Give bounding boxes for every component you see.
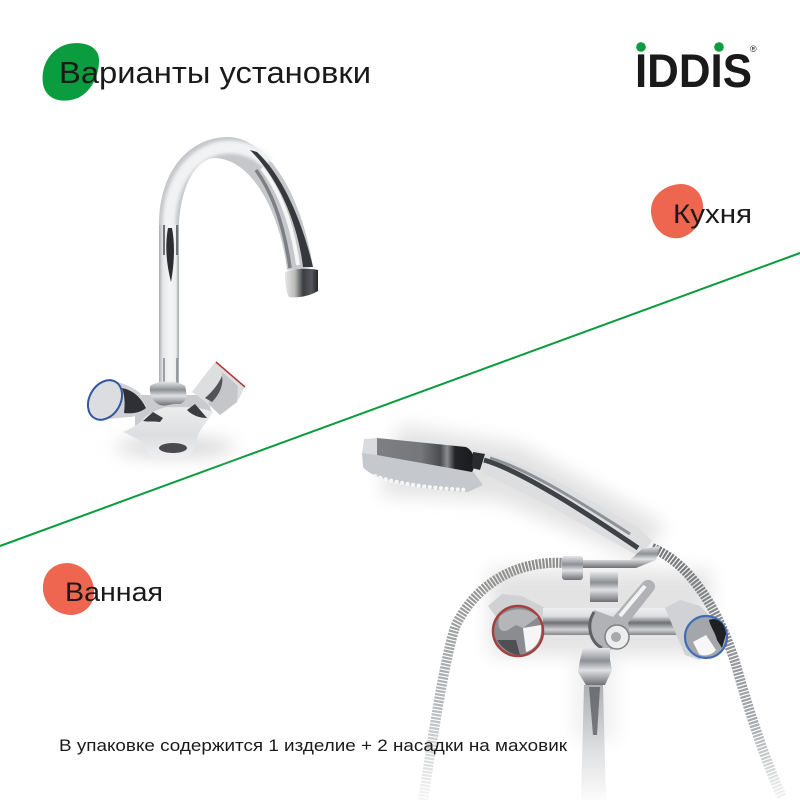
right knob back (665, 600, 710, 660)
package contents note: В упаковке содержится 1 изделие + 2 насадки на маховик (59, 736, 568, 755)
left hose (423, 563, 565, 800)
faucet base (123, 407, 213, 459)
head face (362, 453, 483, 492)
right hose (652, 548, 782, 797)
aerator (285, 269, 318, 297)
shower handle (472, 450, 652, 557)
soft shadows (380, 425, 710, 740)
kitchen text: Кухня (673, 199, 752, 229)
blue knob (685, 616, 727, 658)
green blob (43, 43, 99, 101)
base hole (159, 443, 187, 453)
spout tube (159, 137, 313, 385)
left handle (81, 374, 147, 426)
heading: installation options (43, 43, 371, 101)
shower faucet photo (362, 425, 782, 800)
bathroom text: Ванная (65, 577, 163, 607)
logo dots (636, 42, 724, 52)
shower head (362, 438, 483, 492)
faucet shadow (115, 438, 235, 456)
kitchen faucet photo (81, 137, 318, 459)
heading text: Варианты установки (59, 55, 371, 90)
main bar (543, 608, 687, 635)
collar (150, 382, 186, 406)
orange blob (651, 184, 703, 238)
logo wordmark: IDDIS (635, 44, 752, 97)
logo: IDDIS (635, 42, 757, 97)
spout reflection (166, 228, 174, 282)
nozzles (375, 476, 468, 490)
handle holder (562, 546, 660, 602)
base recesses (143, 404, 207, 422)
right handle (192, 362, 245, 415)
bathroom label (43, 563, 163, 615)
lever handle (590, 580, 655, 650)
kitchen label (651, 184, 752, 238)
divider line (0, 253, 800, 546)
registered mark: ® (750, 44, 757, 54)
bath spout (578, 648, 612, 800)
valve body (488, 594, 710, 660)
left knob back (488, 594, 545, 628)
red knob (493, 606, 543, 656)
head chrome rim (377, 438, 474, 472)
body behind base (135, 395, 212, 430)
orange blob (43, 563, 94, 615)
